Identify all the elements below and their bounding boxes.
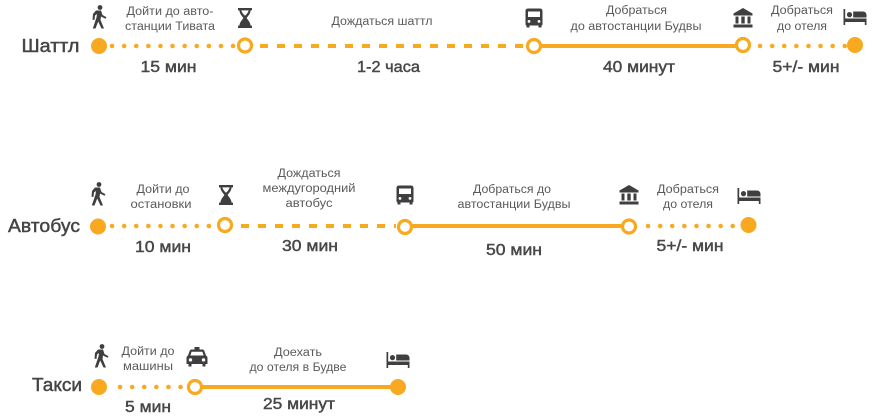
step label: walk to car — [122, 346, 174, 373]
step label: wait for intercity bus: междугородний — [262, 183, 356, 195]
timeline: taxi — [91, 379, 406, 395]
duration: 5 min: 5 мин — [125, 399, 171, 416]
icon: walking person — [94, 344, 108, 368]
step label: reach hotel: Добраться — [771, 5, 833, 17]
step label: drive to hotel: Доехать — [274, 347, 322, 359]
icon: bus — [396, 186, 414, 204]
icon: walking person — [92, 5, 106, 28]
step label: ride to Budva station — [570, 5, 702, 33]
step label: reach hotel: до отеля — [777, 21, 827, 33]
step label: ride to Budva station — [458, 184, 570, 211]
icon: hotel bed — [844, 9, 866, 25]
step label: walk to car: Дойти до — [122, 346, 174, 358]
step label: reach hotel — [657, 184, 719, 211]
duration: 5 min: 5+/- мин — [656, 238, 724, 255]
step label: reach hotel — [771, 5, 833, 33]
heading: bus: Автобус — [8, 215, 80, 236]
route: shuttle — [22, 5, 866, 76]
heading: shuttle: Шаттл — [22, 35, 80, 56]
step label: walk to station: Дойти до авто- — [126, 6, 214, 18]
step label: ride to Budva station: автостанции Будвы — [458, 199, 570, 211]
step label: drive to hotel — [250, 347, 346, 374]
step label: ride to Budva station: Добраться до — [473, 184, 551, 196]
duration: 30 min: 30 мин — [282, 238, 338, 255]
icon: bus station — [734, 8, 752, 28]
step label: walk to stop: остановки — [130, 199, 192, 211]
step label: ride to Budva station: Добраться — [606, 5, 667, 17]
step label: walk to car: машины — [123, 361, 173, 373]
icon: taxi — [186, 347, 208, 366]
duration: 40 minutes: 40 минут — [603, 59, 676, 76]
heading: taxi: Такси — [32, 374, 82, 395]
step label: wait for shuttle: Дождаться шаттл — [332, 16, 432, 28]
step label: wait for intercity bus: Дождаться — [278, 168, 340, 180]
step label: reach hotel: до отеля — [663, 199, 713, 211]
icon: hotel bed — [738, 188, 760, 204]
route: bus — [8, 168, 760, 259]
step label: reach hotel: Добраться — [657, 184, 719, 196]
icon: hourglass — [219, 185, 233, 205]
step label: wait for intercity bus — [262, 168, 356, 210]
duration: 25 minutes: 25 минут — [263, 396, 336, 413]
timeline: shuttle — [91, 37, 863, 54]
step label: walk to station — [125, 6, 216, 33]
step label: wait for intercity bus: автобус — [286, 198, 333, 210]
icon: hotel bed — [386, 352, 410, 368]
step label: walk to stop: Дойти до — [136, 184, 190, 196]
duration: 1-2 hours: 1-2 часа — [357, 59, 420, 76]
icon: bus — [526, 8, 542, 28]
icon: bus station — [620, 185, 638, 204]
duration: 10 min: 10 мин — [135, 239, 191, 256]
step label: ride to Budva station: до автостанции Будвы — [570, 21, 702, 33]
icon: walking person — [92, 182, 106, 206]
step label: walk to stop — [130, 184, 192, 211]
duration: 5 min: 5+/- мин — [772, 59, 840, 76]
step label: drive to hotel: до отеля в Будве — [250, 362, 346, 374]
timeline: bus — [90, 217, 756, 234]
duration: 15 min: 15 мин — [140, 59, 196, 76]
step label: walk to station: станции Тивата — [125, 21, 216, 33]
duration: 50 min: 50 мин — [486, 242, 542, 259]
route: taxi — [32, 344, 410, 416]
icon: hourglass — [238, 8, 252, 28]
